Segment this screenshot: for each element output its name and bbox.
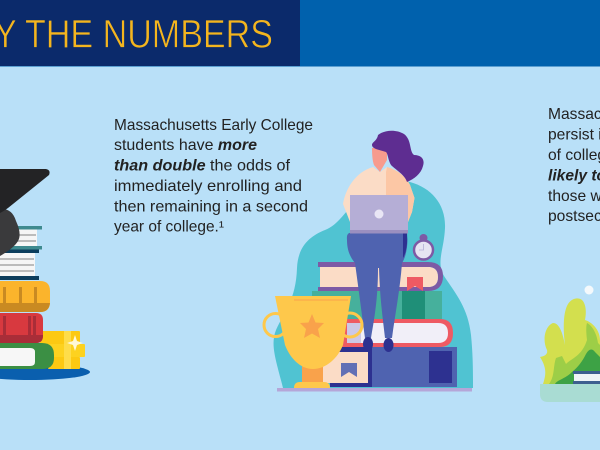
laptop bbox=[350, 195, 408, 234]
ground line bbox=[277, 388, 472, 392]
text block: early college odds: then remaining in a second bbox=[114, 198, 308, 216]
coins bbox=[40, 331, 85, 369]
text block: early college odds: immediately enrolling and bbox=[114, 178, 302, 195]
stacked pages books bbox=[0, 226, 42, 280]
illustration: graduation cap on books bbox=[0, 169, 90, 380]
yellow-green leaves bbox=[540, 298, 600, 384]
text block: persistence, cut off at right edge bbox=[548, 106, 600, 225]
orange book bbox=[0, 281, 50, 312]
hips and legs bbox=[347, 233, 407, 338]
red book bbox=[0, 313, 43, 343]
illustration: plants and book bbox=[540, 286, 600, 402]
text block: early college odds bbox=[114, 117, 313, 236]
gold trophy bbox=[264, 296, 362, 388]
bottom blue book bbox=[322, 347, 457, 387]
purple book bbox=[318, 262, 443, 291]
title: Y THE NUMBERS bbox=[0, 12, 273, 56]
mortarboard cap bbox=[0, 169, 50, 256]
woman bbox=[343, 131, 424, 352]
shadow base bbox=[0, 364, 90, 380]
text block: early college odds: year of college.¹ bbox=[114, 219, 224, 236]
dark green bush bbox=[555, 350, 600, 384]
torso bbox=[343, 167, 414, 222]
alarm clock bbox=[414, 234, 433, 260]
small book bbox=[573, 371, 600, 384]
teal blob bbox=[274, 181, 473, 388]
text block: early college odds: students have more bbox=[114, 137, 257, 154]
green book bbox=[312, 291, 442, 319]
red-edged book bbox=[340, 319, 453, 347]
text block: early college odds: than double the odds of bbox=[114, 158, 291, 174]
shoes bbox=[363, 337, 373, 351]
header band bbox=[0, 0, 600, 66]
mid-green leaves bbox=[549, 323, 600, 384]
text block: early college odds: Massachusetts Early College bbox=[114, 117, 313, 134]
white dot bbox=[584, 286, 594, 294]
illustration: student with laptop on books bbox=[264, 131, 473, 391]
neck and face bbox=[372, 146, 387, 172]
hair bbox=[372, 131, 424, 182]
green book bbox=[0, 343, 54, 369]
pedestal bbox=[540, 384, 600, 402]
